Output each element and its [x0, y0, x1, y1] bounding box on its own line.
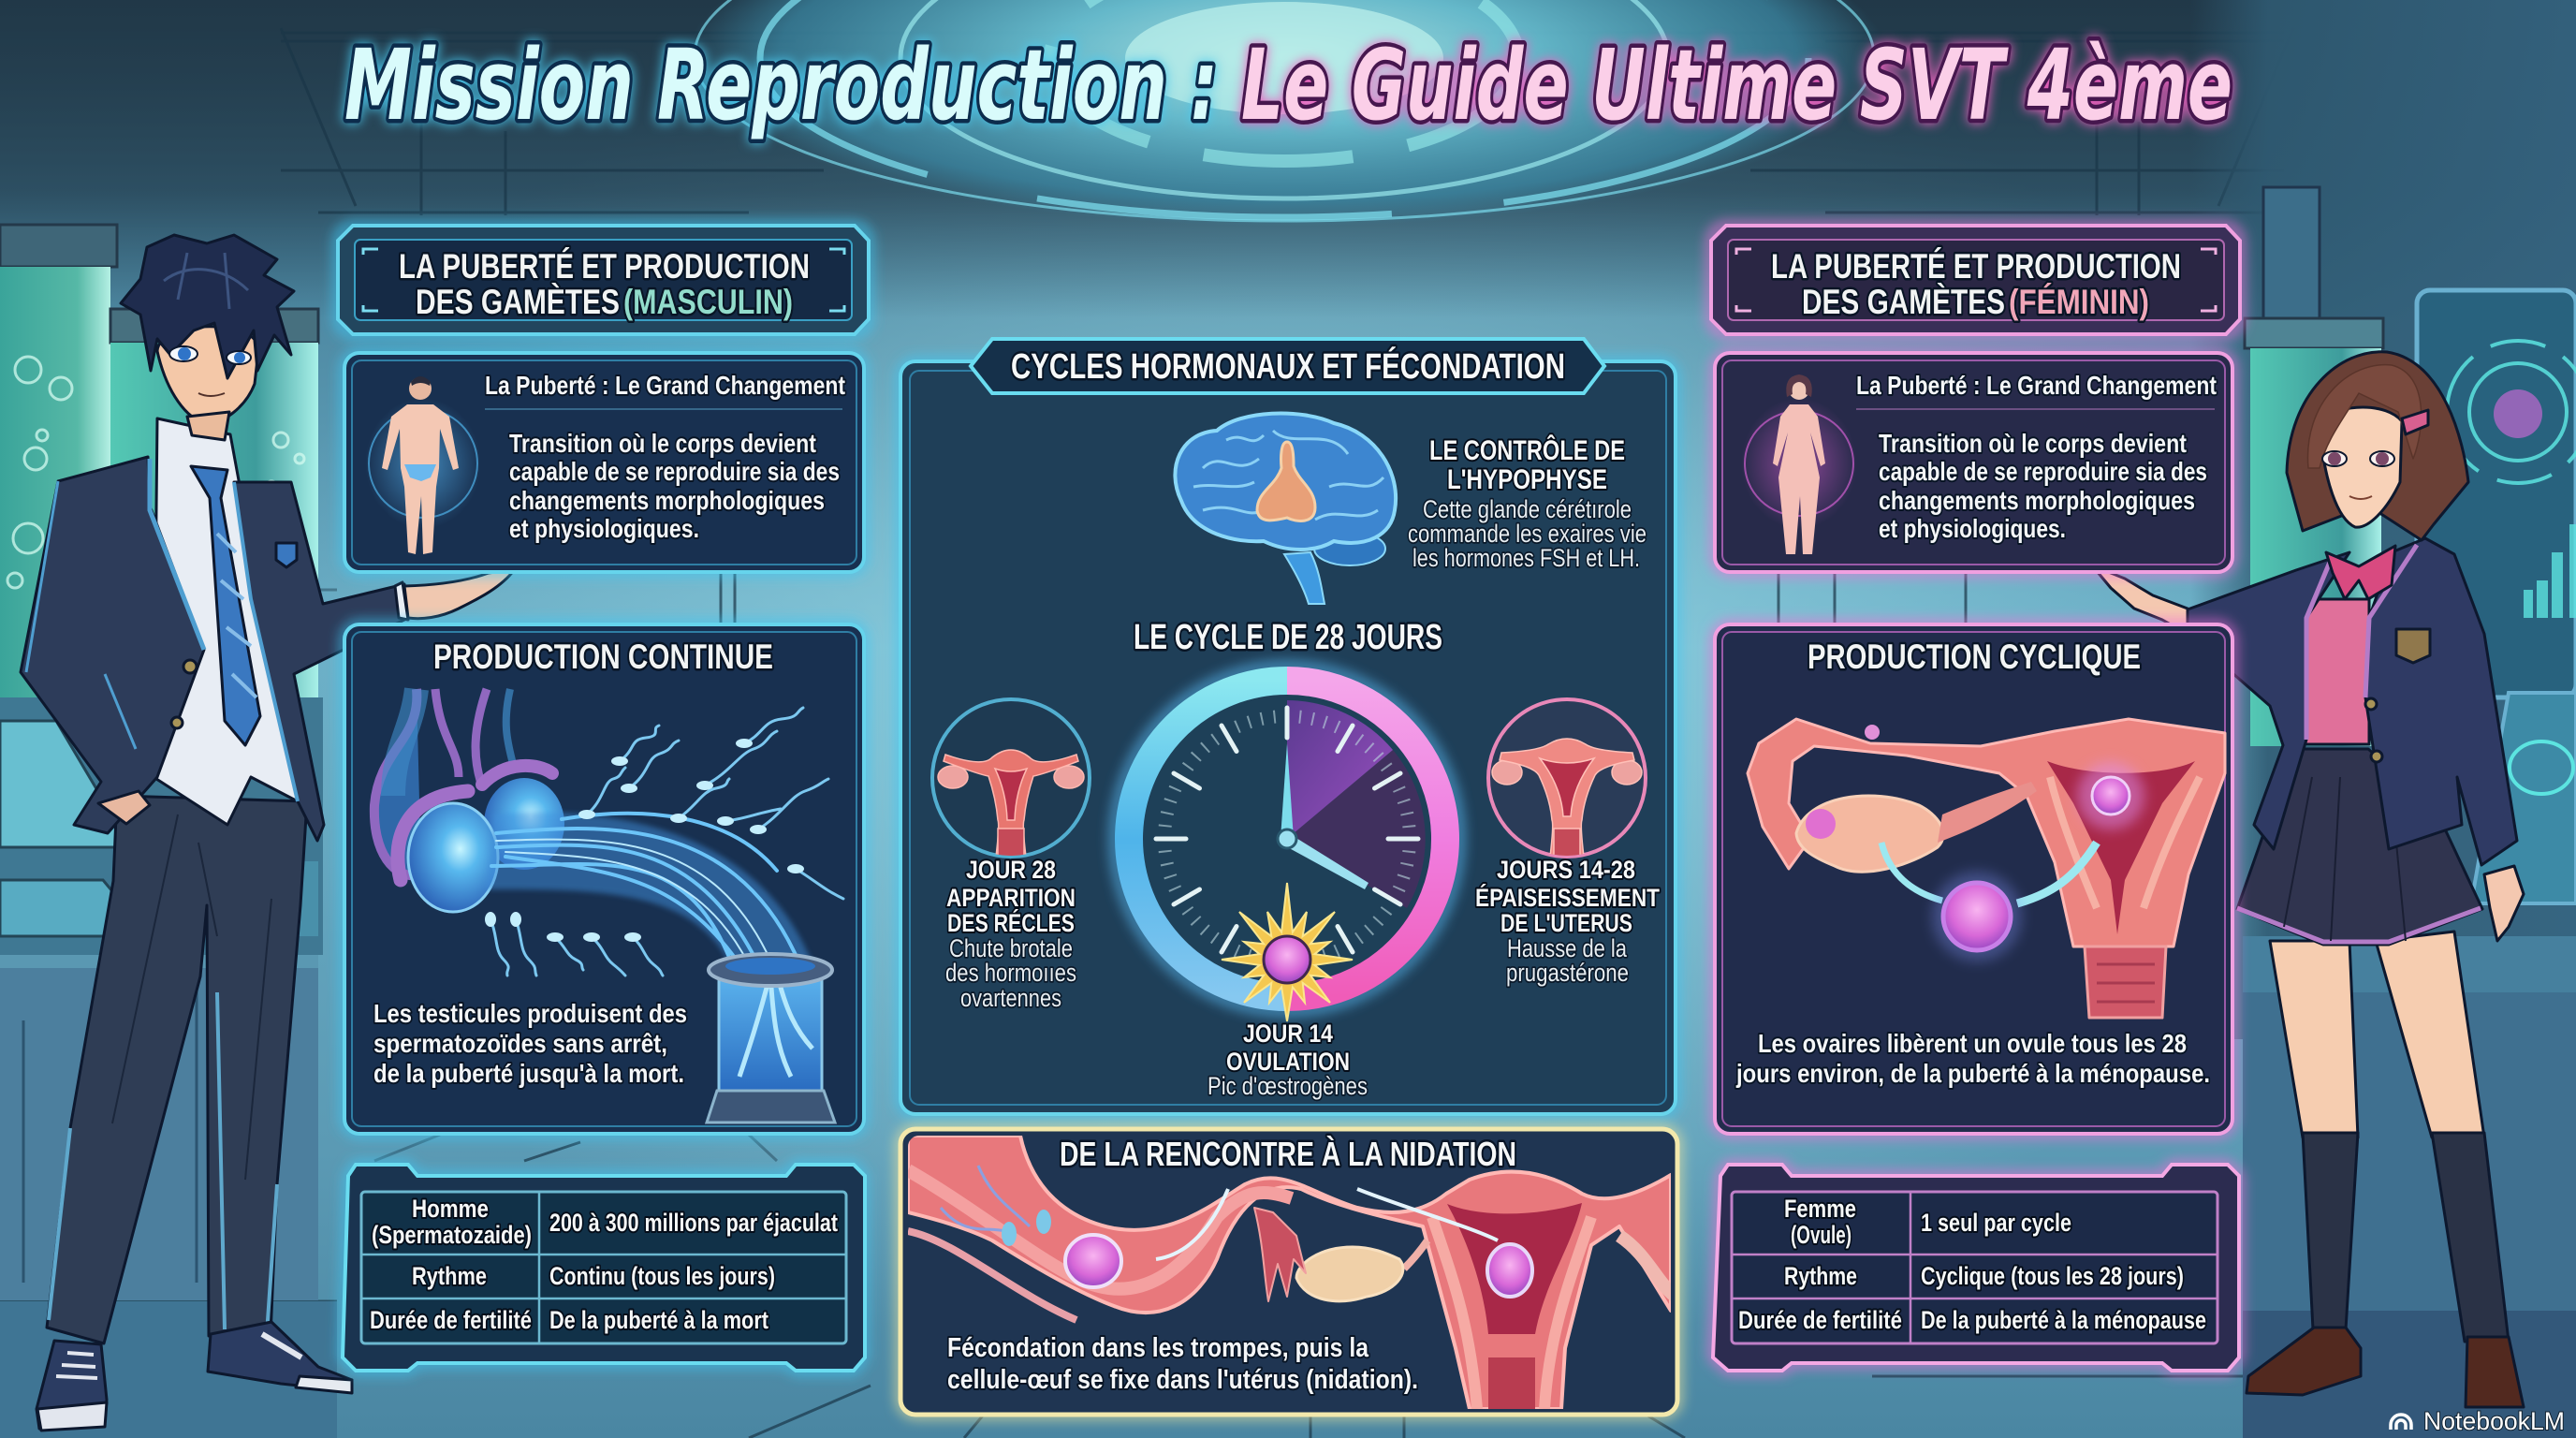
ring: second half — [1287, 681, 1445, 997]
illustration: uterus, ovary and egg — [1748, 719, 2225, 1018]
puberty paragraph: changements morphologiques — [509, 486, 825, 515]
text: pituitary control: commande les exaires vie — [1408, 520, 1647, 548]
text: day 14: JOUR 14 — [1243, 1020, 1333, 1048]
panel: fertilization to nidation — [900, 1129, 1677, 1415]
text: continuous production: de la puberté jusqu'à la mort. — [373, 1059, 684, 1088]
text: pituitary control — [1408, 434, 1647, 572]
girl bow — [2326, 546, 2395, 599]
girl shoes — [2247, 1328, 2524, 1407]
puberty heading: La Puberté : Le Grand Changement — [1856, 371, 2217, 400]
table cells: Cyclique (tous les 28 jours) — [1921, 1262, 2184, 1290]
girl skirt — [2237, 749, 2482, 945]
icon: uterus days 14-28 — [1488, 699, 1646, 857]
illustration: sperm cells — [485, 708, 843, 976]
text: cyclic production — [1735, 1029, 2210, 1088]
text: day 28: ovartennes — [960, 984, 1061, 1012]
girl blazer — [2188, 552, 2349, 849]
puberty paragraph: et physiologiques. — [1879, 514, 2066, 543]
icon: ovulation star — [1222, 883, 1353, 1021]
header: masculine: LA PUBERTÉ ET PRODUCTION — [399, 247, 810, 286]
text: nidation: Fécondation dans les trompes, puis la — [947, 1333, 1369, 1363]
puberty paragraph: capable de se reproduire sia des — [1879, 457, 2207, 486]
table cells: Continu (tous les jours) — [549, 1262, 775, 1290]
text: day 14 — [1208, 1020, 1368, 1100]
puberty paragraph: Transition où le corps devient — [509, 429, 816, 458]
panel: cyclic production — [1715, 624, 2232, 1134]
puberty paragraph: capable de se reproduire sia des — [509, 457, 840, 486]
hologram rings behind title — [688, 0, 1886, 227]
text: day 28: APPARITION — [946, 884, 1076, 912]
text: cyclic production: Les ovaires libèrent un ovule tous les 28 — [1758, 1029, 2187, 1058]
table cells — [1738, 1195, 2206, 1334]
table cells: Homme — [412, 1195, 489, 1223]
character: boy in blazer — [21, 235, 515, 1431]
table: male — [343, 1165, 865, 1371]
heading: nidation: DE LA RENCONTRE À LA NIDATION — [1060, 1135, 1516, 1173]
header: feminine — [1711, 226, 2240, 334]
boy head — [121, 235, 294, 440]
text: pituitary control: L'HYPOPHYSE — [1447, 464, 1607, 495]
panel: puberty male — [344, 353, 864, 572]
header: feminine: DES GAMÈTES — [1802, 283, 2005, 321]
text: days 14-28: DE L'UTERUS — [1500, 909, 1632, 937]
header: masculine: (MASCULIN) — [623, 283, 793, 321]
text: day 14: OVULATION — [1226, 1048, 1350, 1076]
header: feminine: (FÉMININ) — [2009, 283, 2149, 321]
panel: continuous production — [344, 624, 864, 1134]
table cells: Rythme — [1784, 1262, 1857, 1290]
girl pink vest — [2305, 599, 2369, 744]
ring: first half — [1129, 681, 1287, 997]
right lab: tube, monitors and cabinets — [2190, 0, 2576, 1438]
text: cyclic production: jours environ, de la puberté à la ménopause. — [1735, 1059, 2210, 1088]
wedge: early phase — [1287, 700, 1393, 839]
heading: 28-day cycle: LE CYCLE DE 28 JOURS — [1134, 618, 1442, 657]
icon: brain with pituitary gland — [1175, 414, 1396, 604]
table cells: Femme — [1784, 1195, 1856, 1223]
illustration: testicles — [374, 689, 564, 912]
table cells: 200 à 300 millions par éjaculat — [549, 1209, 838, 1237]
chart: 28-day clock — [1115, 667, 1459, 1021]
text: day 14: Pic d'œstrogènes — [1208, 1072, 1368, 1100]
title part 1: Mission Reproduction : — [344, 28, 1218, 142]
table cells: De la puberté à la mort — [549, 1306, 768, 1334]
header: feminine: LA PUBERTÉ ET PRODUCTION — [1771, 247, 2181, 286]
text: continuous production — [373, 999, 687, 1088]
panel: puberty female — [1715, 353, 2232, 572]
text: days 14-28: prugastérone — [1506, 959, 1629, 987]
table: female — [1713, 1165, 2239, 1371]
boy tie — [191, 466, 260, 745]
text: pituitary control: Cette glande cérétırole — [1423, 495, 1632, 523]
watermark: NotebookLM: NotebookLM — [2423, 1407, 2565, 1435]
heading: production cyclique: PRODUCTION CYCLIQUE — [1808, 638, 2141, 676]
text: days 14-28: Hausse de la — [1507, 934, 1628, 962]
title — [344, 28, 2232, 142]
table cells: De la puberté à la ménopause — [1921, 1306, 2206, 1334]
header: masculine: DES GAMÈTES — [416, 283, 620, 321]
text: pituitary control: LE CONTRÔLE DE — [1429, 434, 1625, 466]
text: days 14-28: ÉPAISEISSEMENT — [1475, 883, 1660, 912]
heading: production continue: PRODUCTION CONTINUE — [433, 638, 773, 676]
left lab: tall tubes and consoles — [0, 225, 337, 1438]
text: day 28 — [945, 856, 1076, 1012]
text: continuous production: spermatozoïdes sans arrêt, — [373, 1029, 667, 1058]
table cells — [370, 1195, 838, 1334]
boy shirt — [154, 418, 298, 825]
puberty paragraph — [1879, 429, 2207, 543]
puberty paragraph: Transition où le corps devient — [1879, 429, 2187, 458]
text: day 28: JOUR 28 — [966, 856, 1056, 884]
text: days 14-28 — [1475, 856, 1660, 987]
puberty heading: La Puberté : Le Grand Changement — [485, 371, 845, 400]
header: masculine — [338, 226, 869, 334]
text: nidation — [947, 1333, 1418, 1395]
text: continuous production: Les testicules produisent des — [373, 999, 687, 1028]
illustration: blue stream — [487, 813, 812, 964]
banner — [971, 339, 1604, 393]
boy trousers — [47, 796, 307, 1343]
text: day 28: DES RÉCLES — [947, 908, 1075, 937]
banner: CYCLES HORMONAUX ET FÉCONDATION — [1011, 345, 1565, 387]
table cells: 1 seul par cycle — [1921, 1209, 2071, 1237]
character: girl in blazer — [2092, 352, 2524, 1407]
clock hands — [1278, 743, 1368, 889]
table cells: (Ovule) — [1791, 1221, 1852, 1249]
text: pituitary control: les hormones FSH et LH. — [1412, 544, 1640, 572]
puberty paragraph — [509, 429, 840, 543]
table cells: Durée de fertilité — [370, 1306, 532, 1334]
icon: male body with aura — [365, 376, 481, 554]
text: day 28: Chute brotale — [949, 934, 1073, 962]
boy hands — [98, 569, 515, 824]
girl head — [2287, 352, 2468, 540]
boy shoes — [37, 1322, 352, 1431]
panel: hormonal cycles — [900, 339, 1676, 1114]
icon: uterus day 28 — [932, 699, 1090, 857]
girl legs and socks — [2270, 932, 2509, 1342]
girl hands — [2092, 565, 2524, 941]
text: nidation: cellule-œuf se fixe dans l'utérus (nidation). — [947, 1365, 1418, 1395]
puberty paragraph: et physiologiques. — [509, 514, 699, 543]
text: days 14-28: JOURS 14-28 — [1497, 856, 1635, 884]
illustration: fallopian tube and uterus — [908, 1136, 1676, 1409]
boy blazer — [21, 457, 408, 841]
wedge: late phase — [1287, 750, 1426, 908]
text: day 28: des hormoııes — [945, 959, 1076, 987]
table cells: Rythme — [412, 1262, 487, 1290]
puberty paragraph: changements morphologiques — [1879, 486, 2195, 515]
table cells: Durée de fertilité — [1738, 1306, 1902, 1334]
table cells: (Spermatozaide) — [372, 1221, 532, 1249]
icon: female body with aura — [1741, 374, 1857, 554]
illustration: collection jar — [707, 954, 835, 1123]
